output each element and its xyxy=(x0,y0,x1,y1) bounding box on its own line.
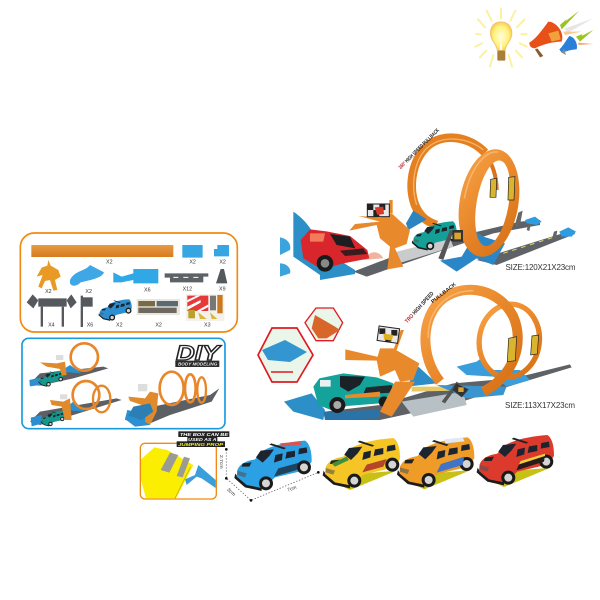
teal car xyxy=(313,373,395,413)
finish post xyxy=(438,230,463,260)
triple loop layout xyxy=(125,372,219,427)
icon: light bulb xyxy=(475,8,527,67)
DIY logo xyxy=(175,341,221,368)
loop rear xyxy=(412,138,497,225)
car dimensions xyxy=(218,448,320,502)
sticker sheet two xyxy=(186,294,224,321)
caption xyxy=(177,431,229,448)
cone xyxy=(216,269,227,283)
checkered flag xyxy=(377,326,400,343)
quantity labels: X4 xyxy=(48,322,55,328)
front loop xyxy=(425,290,518,392)
quantity labels: X6 xyxy=(87,322,93,328)
icon: megaphones with sparks xyxy=(529,11,593,57)
cars row xyxy=(234,435,554,491)
red car xyxy=(301,229,383,272)
sticker sheet one xyxy=(137,299,180,315)
size label: lower set: SIZE:113X17X23cm xyxy=(505,401,575,410)
quantity labels: X6 xyxy=(144,287,151,293)
double loop layout xyxy=(30,381,122,426)
quantity labels: X9 xyxy=(219,286,226,292)
curved slogan: 360° HIGH SPEED PULLBACK xyxy=(398,128,441,171)
quantity labels: X2 xyxy=(116,322,123,328)
quantity labels: X2 xyxy=(155,322,162,328)
DIY logo: DIY xyxy=(176,341,221,365)
road xyxy=(325,364,572,420)
single loop layout xyxy=(29,343,108,387)
loop stickers xyxy=(507,335,539,362)
road piece xyxy=(165,273,208,282)
blue ramp xyxy=(185,465,216,488)
caption: USED AS A xyxy=(188,437,217,443)
quantity labels: X2 xyxy=(219,259,226,265)
orange car xyxy=(397,437,474,489)
car dimensions: 2.7cm xyxy=(218,455,224,469)
caption: THE BOX CAN BE xyxy=(180,432,229,438)
size label: top set: SIZE:120X21X23cm xyxy=(506,263,576,272)
connector xyxy=(113,269,158,283)
blue connector xyxy=(182,245,203,258)
quantity labels: X2 xyxy=(85,289,92,295)
quantity labels: X2 xyxy=(106,259,113,265)
yellow box xyxy=(141,447,193,498)
lower track set: double loop xyxy=(284,281,572,420)
blue clip xyxy=(214,245,229,256)
small gates xyxy=(515,211,557,238)
loop front xyxy=(451,144,527,262)
quantity labels xyxy=(45,259,226,328)
blue car xyxy=(234,441,312,491)
quantity labels: X2 xyxy=(189,259,196,265)
launcher xyxy=(37,260,61,291)
hexagon badge: large xyxy=(258,328,313,382)
quantity labels: X12 xyxy=(183,286,192,292)
panel: jumping prop xyxy=(140,431,229,499)
red car xyxy=(477,435,554,487)
gantry flags xyxy=(27,294,93,327)
launcher tower xyxy=(345,330,419,417)
straight track xyxy=(31,245,173,257)
blue supports xyxy=(406,211,427,230)
hexagon badge: small xyxy=(305,308,343,341)
little blue cars xyxy=(525,217,576,237)
top track set: double loop xyxy=(280,128,576,280)
tread marks xyxy=(161,453,178,473)
caption: JUMPING PROP xyxy=(178,442,224,448)
blue base pieces xyxy=(284,393,325,420)
panel: DIY configurations xyxy=(22,338,225,429)
green car xyxy=(412,221,457,250)
orange launcher tower xyxy=(349,213,410,269)
quantity labels: X3 xyxy=(204,322,211,328)
yellow car xyxy=(323,438,400,490)
quantity labels: X2 xyxy=(45,289,52,295)
small car xyxy=(99,299,132,321)
lower track set: double loop: PULLBACK xyxy=(430,281,458,305)
car dimensions: 7cm xyxy=(287,485,298,494)
DIY logo: BODY MODELING xyxy=(178,362,217,368)
rear loop xyxy=(475,300,544,381)
launch ramp xyxy=(70,265,104,286)
panel: parts list xyxy=(20,233,237,332)
finish post xyxy=(442,382,469,403)
curved slogan: TRO HIGH SPEED xyxy=(404,291,436,325)
launch ramp xyxy=(293,212,355,280)
car dimensions: 3cm xyxy=(225,487,236,498)
road xyxy=(353,220,540,277)
checkered flag xyxy=(367,204,389,217)
loop stickers xyxy=(490,177,515,200)
